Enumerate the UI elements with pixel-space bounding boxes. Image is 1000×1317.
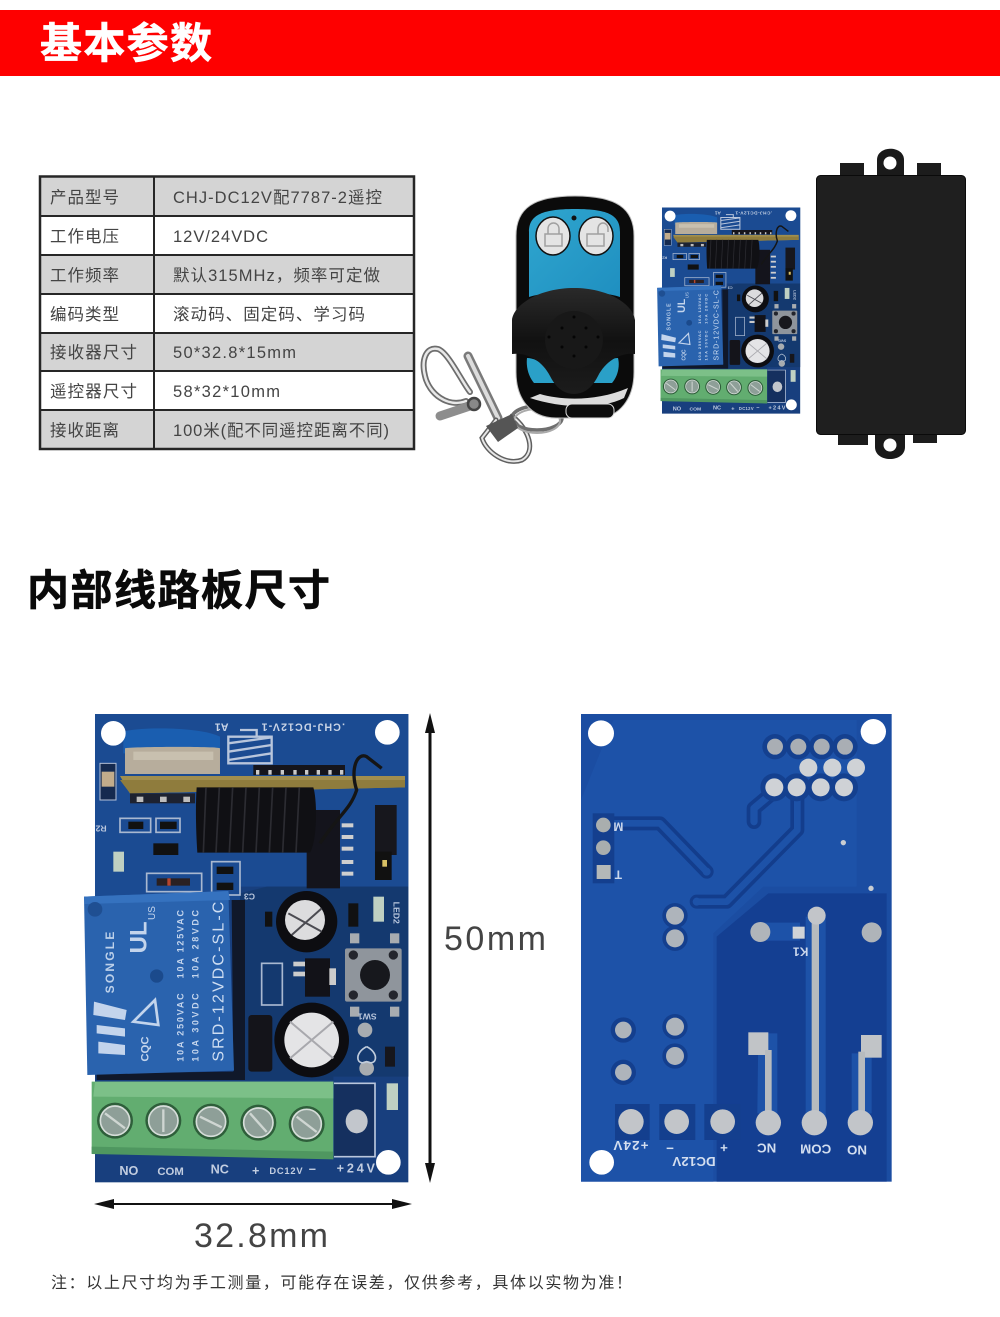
dimension label: 50mm: 50mm bbox=[444, 920, 546, 958]
photo: receiver board front: LED2 bbox=[391, 902, 401, 924]
row: 编码类型: 滚动码、固定码、学习码 bbox=[173, 305, 365, 324]
bottom silk labels: NC bbox=[211, 1162, 229, 1176]
photo: key fob remote with clasp bbox=[424, 196, 635, 461]
row: 工作电压: 12V/24VDC bbox=[173, 228, 268, 246]
relay body: US bbox=[147, 906, 158, 920]
terminal pads bbox=[615, 1104, 873, 1140]
relay body: 10A 30VDC bbox=[190, 993, 200, 1062]
traces bbox=[607, 790, 797, 902]
lock button bbox=[536, 217, 570, 255]
heading: 内部线路板尺寸: 内部线路板尺寸 bbox=[27, 567, 330, 614]
diode bbox=[248, 1015, 272, 1072]
row: 工作频率: 默认315MHz，频率可定做 bbox=[173, 266, 380, 285]
left T/M pads bbox=[593, 813, 623, 883]
mirrored silk labels: − bbox=[666, 1141, 674, 1156]
mirrored silk labels bbox=[613, 1138, 867, 1169]
row: 编码类型 bbox=[50, 305, 365, 324]
arrow: horizontal 32.8mm bbox=[94, 1199, 412, 1209]
relay body: CQC bbox=[139, 1036, 151, 1062]
relay K1 traces bbox=[750, 907, 882, 1117]
footnote: 注：以上尺寸均为手工测量，可能存在误差，仅供参考，具体以实物为准！ bbox=[51, 1274, 632, 1292]
row: 产品型号: 产品型号 bbox=[50, 188, 119, 207]
receiver module pins row bbox=[253, 765, 345, 775]
arrow: vertical 50mm bbox=[425, 713, 435, 1183]
+24V pad bbox=[334, 1083, 375, 1157]
left inductor bbox=[100, 763, 116, 800]
photo: receiver board front: C3 bbox=[244, 891, 255, 901]
photo: receiver board front: SW1 bbox=[358, 1011, 377, 1021]
relay body: 10A 28VDC bbox=[190, 909, 200, 978]
relay body: SRD-12VDC-SL-C bbox=[210, 902, 227, 1062]
row: 遥控器尺寸: 遥控器尺寸 bbox=[50, 382, 137, 401]
photo: receiver board front: R2 bbox=[95, 823, 107, 833]
mirrored silk labels: COM bbox=[800, 1141, 831, 1156]
vias and round pads bbox=[611, 903, 688, 1085]
relay body: SONGLE bbox=[103, 932, 117, 993]
coil antenna bbox=[196, 787, 316, 853]
row: 接收器尺寸: 50*32.8*15mm bbox=[173, 344, 296, 362]
antenna coil silkscreen bbox=[228, 730, 272, 763]
bottom silk labels: − bbox=[309, 1162, 316, 1176]
capacitor C4 bbox=[274, 1003, 349, 1077]
unlock button bbox=[579, 217, 613, 255]
row: 产品型号: CHJ-DC12V配7787-2遥控 bbox=[173, 188, 382, 207]
row: 接收器尺寸: 接收器尺寸 bbox=[50, 343, 137, 362]
row: 工作频率 bbox=[50, 266, 380, 285]
row: 接收距离: 接收距离 bbox=[50, 421, 119, 440]
photo: front of receiver board (small) bbox=[657, 208, 800, 414]
dimension label: 32.8mm: 32.8mm bbox=[194, 1217, 328, 1255]
photo: receiver board back bbox=[581, 714, 892, 1182]
relay K1 traces: K1 bbox=[793, 944, 808, 958]
key clasp bbox=[424, 349, 562, 461]
parameter table bbox=[40, 176, 414, 449]
row: 遥控器尺寸 bbox=[50, 382, 280, 401]
mirrored silk labels: + bbox=[720, 1141, 728, 1156]
ground plane bbox=[717, 893, 887, 1182]
row: 工作频率: 工作频率 bbox=[50, 266, 119, 285]
blue plate bbox=[529, 209, 620, 297]
row: 工作电压: 工作电压 bbox=[50, 227, 119, 246]
row: 遥控器尺寸: 58*32*10mm bbox=[173, 383, 280, 401]
jumper bbox=[375, 805, 397, 855]
bottom silk labels: COM bbox=[157, 1166, 184, 1178]
photo: black enclosure bbox=[816, 149, 966, 459]
terminal block bbox=[92, 1082, 333, 1159]
row: 编码类型: 编码类型 bbox=[50, 305, 119, 324]
header banner: 基本参数 bbox=[0, 10, 1000, 76]
lower blue wedges bbox=[527, 358, 556, 383]
bottom silk labels: + bbox=[252, 1164, 259, 1178]
relay body bbox=[84, 891, 245, 1080]
IC chip bbox=[307, 810, 340, 888]
bottom silk labels: +24V bbox=[337, 1162, 376, 1176]
crystal bbox=[125, 747, 220, 774]
capacitor C2 bbox=[276, 891, 337, 952]
relay logo bbox=[93, 1002, 127, 1055]
tact button bbox=[345, 948, 402, 1002]
top pads row bbox=[760, 734, 865, 801]
silk text top bbox=[215, 720, 345, 732]
fob body bbox=[516, 196, 634, 418]
mirrored silk labels: +24V bbox=[613, 1138, 648, 1153]
holes bbox=[588, 719, 886, 1175]
silk text top: .CHJ-DC12V-1 bbox=[262, 720, 345, 732]
LEDs bbox=[113, 852, 398, 1110]
SOT regulator bbox=[293, 958, 336, 997]
relay body: 10A 250VAC bbox=[175, 993, 185, 1062]
row: 接收距离 bbox=[50, 421, 389, 440]
row: 工作电压 bbox=[50, 227, 268, 246]
rubber sleeve bbox=[512, 288, 635, 394]
NO trace bbox=[852, 1035, 882, 1117]
bottom silk labels bbox=[119, 1162, 376, 1178]
bottom silk labels: DC12V bbox=[269, 1166, 303, 1176]
header banner: 基本参数: 基本参数 bbox=[40, 20, 212, 67]
row: 接收距离: 100米(配不同遥控距离不同) bbox=[173, 421, 389, 440]
bottom silk labels: NO bbox=[119, 1164, 138, 1178]
holes bbox=[101, 720, 401, 1175]
NC trace bbox=[748, 1032, 777, 1117]
mirrored silk labels: NO bbox=[847, 1142, 867, 1157]
module pcb edge bbox=[120, 776, 405, 793]
left T/M pads: M bbox=[613, 819, 623, 833]
silk text top: A1 bbox=[215, 720, 228, 732]
resistors and small parts bbox=[128, 822, 358, 927]
row: 接收器尺寸 bbox=[50, 343, 296, 362]
row: 产品型号 bbox=[50, 188, 382, 207]
left T/M pads: T bbox=[614, 868, 622, 882]
relay body: 10A 125VAC bbox=[175, 909, 185, 978]
relay body: UL bbox=[126, 921, 153, 953]
photo: receiver board front bbox=[84, 714, 408, 1182]
mirrored silk labels: DC12V bbox=[672, 1154, 716, 1169]
mirrored silk labels: NC bbox=[757, 1141, 776, 1156]
